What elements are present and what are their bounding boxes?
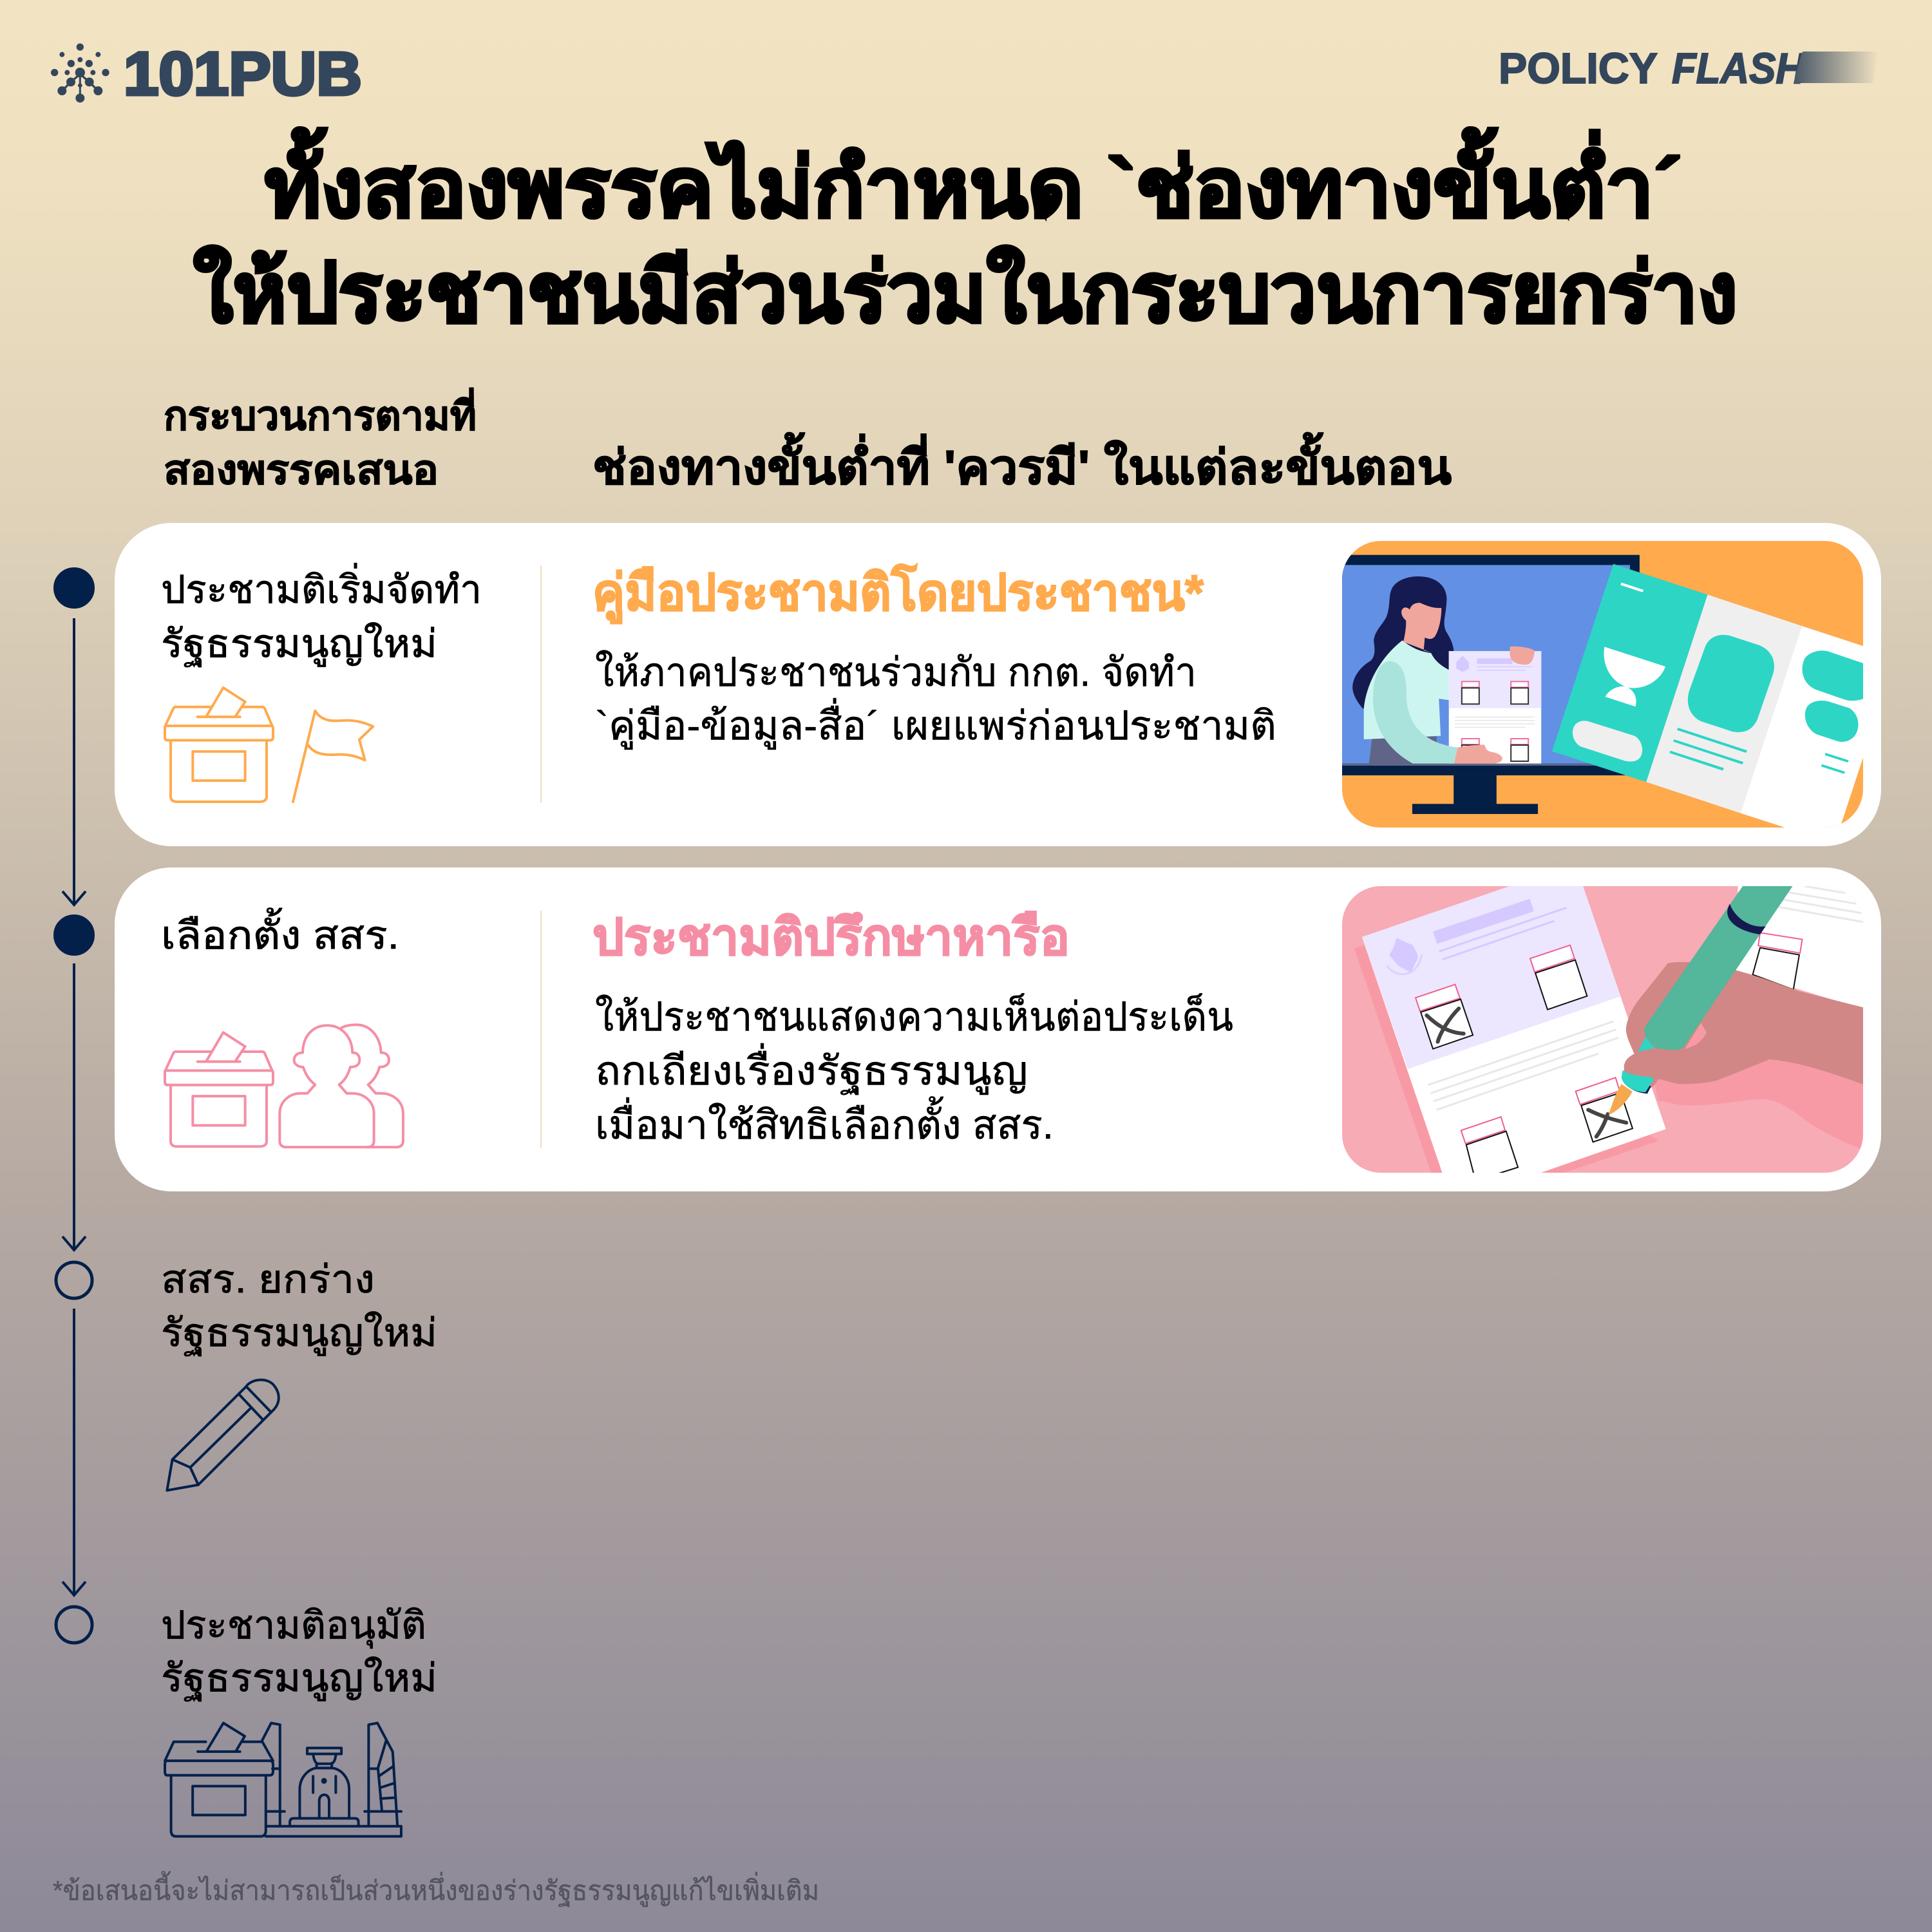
brand: POLICY FLASH: POLICY <box>1499 44 1658 93</box>
panel: card 2 <box>115 867 1881 1191</box>
icon: ballot box and voters <box>165 1025 403 1147</box>
timeline arrow 1 <box>62 618 86 905</box>
step 3 text: รัฐธรรมนูญใหม่ <box>161 1311 437 1356</box>
step 3 text: สสร. ยกร่าง <box>161 1258 375 1301</box>
timeline arrow 2 <box>62 963 86 1250</box>
timeline arrow 3 <box>62 1309 86 1595</box>
step marker 4 <box>56 1607 92 1643</box>
step 1 text: ประชามติเริ่มจัดทำ <box>161 563 482 611</box>
illustration: woman on monitor with brochure <box>1342 541 1863 828</box>
body text: handbook: `คู่มือ-ข้อมูล-สื่อ´ เผยแพร่ก่อนประชามติ <box>595 698 1276 750</box>
title: ให้ประชาชนมีส่วนร่วมในกระบวนการยกร่าง <box>193 246 1738 339</box>
timeline <box>55 569 93 1643</box>
body text: handbook <box>595 650 1276 750</box>
step 2 text: เลือกตั้ง สสร. <box>161 907 399 957</box>
step 4 text: ประชามติอนุมัติ <box>161 1604 426 1649</box>
icon: ballot box and democracy monument <box>165 1723 401 1837</box>
step marker 1 <box>55 569 93 607</box>
body text: deliberation <box>595 993 1233 1148</box>
title: ทั้งสองพรรคไม่กำหนด `ช่องทางขั้นต่ำ´ <box>265 128 1682 234</box>
body text: deliberation: ถกเถียงเรื่องรัฐธรรมนูญ <box>595 1043 1028 1095</box>
column heading: process: สองพรรคเสนอ <box>164 448 439 493</box>
icon: logo dots <box>51 43 109 102</box>
step 4 text <box>161 1604 437 1701</box>
column heading: minimum channels: ช่องทางขั้นต่ำที่ 'ควรมี' ในแต่ละขั้นตอน <box>592 432 1452 494</box>
body text: handbook: ให้ภาคประชาชนร่วมกับ กกต. จัดทำ <box>595 650 1197 695</box>
step marker 3 <box>56 1262 92 1298</box>
heading: deliberation: ประชามติปรึกษาหารือ <box>592 909 1070 965</box>
step 1 text: รัฐธรรมนูญใหม่ <box>161 622 437 667</box>
heading: handbook: คู่มือประชามติโดยประชาชน* <box>592 563 1204 624</box>
illustration: hand marking ballot <box>1342 886 1863 1180</box>
step 1 text <box>161 563 482 667</box>
footnote: *ข้อเสนอนี้จะไม่สามารถเป็นส่วนหนึ่งของร่างรัฐธรรมนูญแก้ไขเพิ่มเติม <box>53 1871 819 1907</box>
step 3 text <box>161 1258 437 1356</box>
brand: POLICY FLASH: FLASH <box>1672 44 1805 93</box>
panel: card 1 <box>115 523 1896 846</box>
title <box>193 128 1738 339</box>
logo wordmark: 101PUB <box>124 40 362 108</box>
column heading: process: กระบวนการตามที่ <box>164 388 477 439</box>
brand: POLICY FLASH <box>1499 44 1878 93</box>
body text: deliberation: เมื่อมาใช้สิทธิเลือกตั้ง สสร. <box>595 1096 1054 1148</box>
body text: deliberation: ให้ประชาชนแสดงความเห็นต่อประเด็น <box>595 993 1233 1039</box>
logo: 101PUB <box>51 40 362 108</box>
icon: pencil <box>167 1380 279 1490</box>
step 4 text: รัฐธรรมนูญใหม่ <box>161 1656 437 1701</box>
column heading: process <box>164 388 477 493</box>
icon: ballot box and flag <box>165 688 373 802</box>
step marker 2 <box>55 916 93 954</box>
